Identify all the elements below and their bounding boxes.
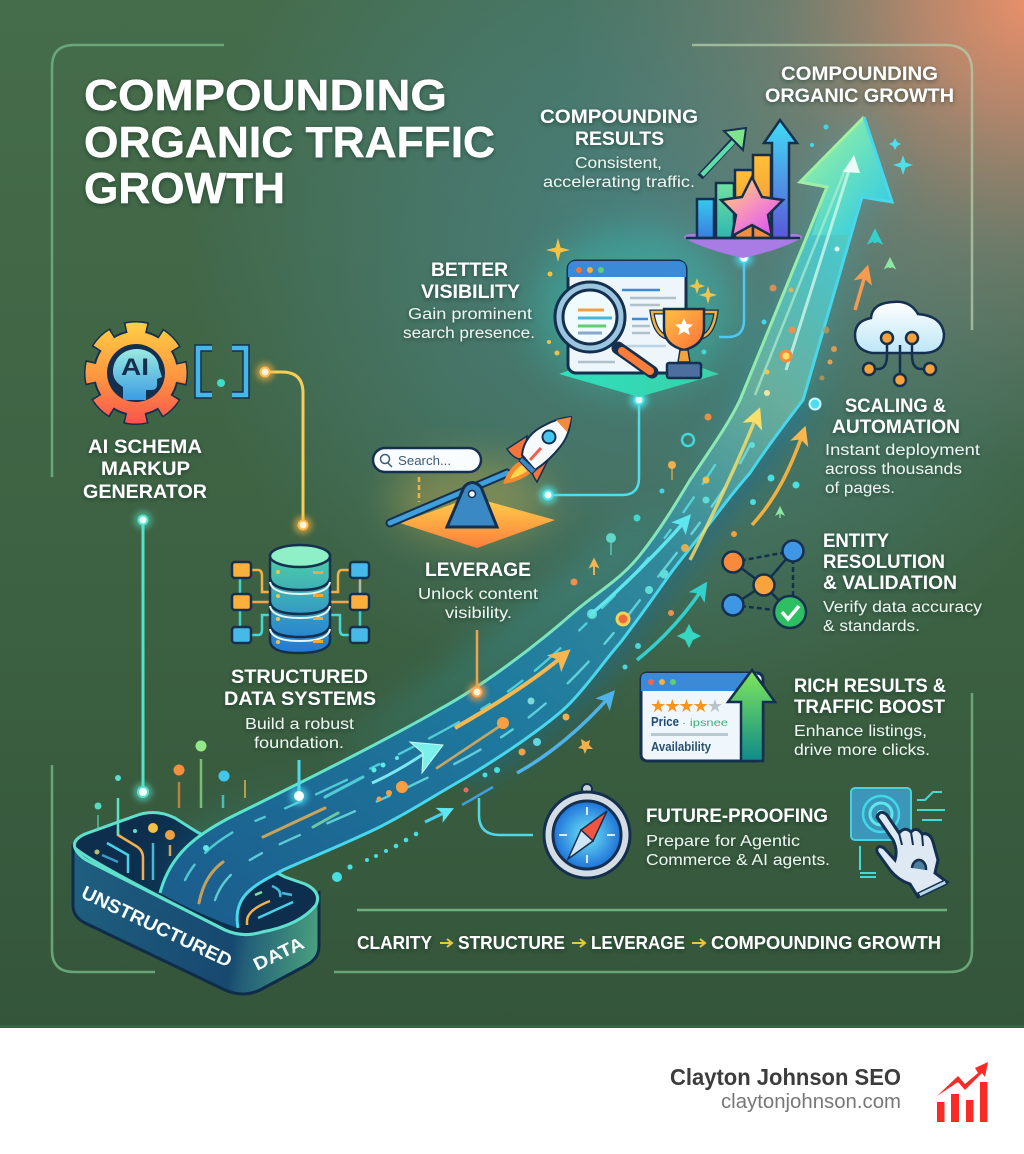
heading: Compounding Organic Growth: COMPOUNDING bbox=[781, 64, 938, 85]
AI letters: AI bbox=[121, 354, 149, 381]
box front rim bbox=[75, 848, 316, 935]
heading: Structured Data Systems: Build a robust bbox=[245, 716, 355, 733]
heading: Rich Results: TRAFFIC BOOST bbox=[794, 697, 945, 718]
heading: Compounding Organic Growth bbox=[765, 64, 954, 107]
heading: Rich Results: RICH RESULTS & bbox=[794, 676, 946, 697]
particles above box bbox=[94, 740, 245, 830]
divider bbox=[357, 909, 947, 911]
brand name: Clayton Johnson SEO bbox=[670, 1064, 901, 1090]
heading: Entity Resolution: & standards. bbox=[823, 618, 920, 635]
ribbon dots bbox=[203, 246, 840, 851]
connector: brackets to database bbox=[256, 363, 312, 534]
stars: ★★★★★ bbox=[650, 696, 723, 716]
tagline: STRUCTURE bbox=[458, 933, 565, 953]
heading: Entity Resolution: Verify data accuracy bbox=[823, 599, 982, 616]
heading: AI Schema Markup Generator: MARKUP bbox=[101, 459, 190, 480]
connector: leverage to ribbon bbox=[468, 630, 486, 701]
box label: UNSTRUCTURED bbox=[78, 883, 235, 972]
icon: AI gear bbox=[92, 329, 180, 417]
heading: Better Visibility: VISIBILITY bbox=[421, 282, 520, 303]
heading: Entity Resolution: RESOLUTION bbox=[823, 552, 945, 573]
heading: Scaling & Automation: across thousands bbox=[825, 461, 962, 478]
heading: Leverage: visibility. bbox=[445, 605, 512, 622]
box contents bbox=[102, 798, 293, 925]
inner arrow light bbox=[786, 170, 849, 370]
icon: rich results card: · ipsnee bbox=[682, 717, 728, 729]
sparkles bbox=[546, 238, 717, 356]
icon: better visibility window with magnifier and trophy bbox=[535, 230, 735, 397]
icon: brackets bbox=[198, 348, 246, 395]
brand url: claytonjohnson.com bbox=[721, 1091, 901, 1113]
heading: Leverage: LEVERAGE bbox=[425, 560, 531, 581]
title bbox=[84, 71, 495, 213]
tagline: CLARITY bbox=[357, 933, 432, 953]
icon: unstructured data box: DATA bbox=[250, 933, 307, 975]
heading: Compounding Results bbox=[540, 107, 698, 191]
icon: lever with search and rocket bbox=[373, 417, 571, 548]
heading: Leverage bbox=[418, 560, 539, 622]
heading: Structured Data Systems bbox=[224, 667, 376, 752]
heading: Scaling & Automation: AUTOMATION bbox=[832, 417, 960, 438]
heading: Future-Proofing: Prepare for Agentic bbox=[646, 833, 800, 850]
heading: Structured Data Systems: foundation. bbox=[254, 735, 344, 752]
icon: database bbox=[232, 545, 369, 653]
tagline: COMPOUNDING GROWTH bbox=[711, 933, 941, 953]
heading: Better Visibility: Gain prominent bbox=[408, 306, 533, 323]
connector dot: scaling bbox=[810, 398, 820, 410]
heading: Scaling & Automation: of pages. bbox=[825, 480, 895, 497]
rocket bbox=[503, 417, 571, 484]
heading: AI Schema Markup Generator: GENERATOR bbox=[83, 482, 207, 503]
dotted trail and particles bbox=[332, 124, 913, 882]
arrow head highlight bbox=[800, 117, 892, 235]
heading: AI Schema Markup Generator: AI SCHEMA bbox=[88, 437, 202, 458]
heading: Entity Resolution bbox=[823, 531, 982, 635]
heading: Future-Proofing bbox=[646, 806, 830, 869]
search bar bbox=[373, 448, 481, 472]
heading: Scaling & Automation: Instant deployment bbox=[825, 442, 981, 459]
search bar: Search... bbox=[398, 453, 451, 468]
heading: Compounding Results: RESULTS bbox=[575, 129, 664, 150]
heading: Structured Data Systems: STRUCTURED bbox=[231, 667, 368, 688]
trophy bbox=[652, 309, 716, 378]
arrows beside ribbon bbox=[425, 235, 890, 822]
heading: Better Visibility: BETTER bbox=[431, 260, 508, 281]
lane dashes bbox=[185, 445, 750, 903]
frame outline bbox=[52, 45, 972, 972]
connector: generator to box bbox=[134, 511, 152, 801]
title: COMPOUNDING bbox=[84, 71, 447, 120]
heading: Compounding Results: Consistent, bbox=[575, 155, 662, 172]
connector: lever to better visibility bbox=[539, 391, 648, 504]
connector: trophy to chart bbox=[719, 249, 753, 337]
price: Price bbox=[651, 715, 679, 729]
tagline: LEVERAGE bbox=[591, 933, 685, 953]
title: GROWTH bbox=[84, 164, 285, 213]
heading: Entity Resolution: & VALIDATION bbox=[823, 573, 957, 594]
title: ORGANIC TRAFFIC bbox=[84, 118, 495, 167]
heading: Rich Results: drive more clicks. bbox=[794, 742, 930, 759]
heading: Future-Proofing: Commerce & AI agents. bbox=[646, 852, 830, 869]
heading: Rich Results: Enhance listings, bbox=[794, 723, 927, 740]
heading: Better Visibility bbox=[403, 260, 535, 342]
heading: Leverage: Unlock content bbox=[418, 586, 539, 603]
heading: Future-Proofing: FUTURE-PROOFING bbox=[646, 806, 828, 827]
icon: entity graph bbox=[722, 540, 806, 628]
connector: ribbon to compass bbox=[462, 787, 533, 835]
icon: compounding results chart bbox=[684, 120, 802, 258]
heading: Better Visibility: search presence. bbox=[403, 325, 535, 342]
heading: AI Schema Markup Generator bbox=[83, 437, 207, 503]
icon: red growth chart bbox=[937, 1062, 988, 1122]
icon: cloud automation bbox=[855, 302, 944, 386]
connector: structured data to ribbon bbox=[290, 760, 308, 805]
tagline bbox=[357, 933, 941, 953]
heading: Scaling & Automation: SCALING & bbox=[845, 396, 946, 417]
growth ribbon arrow bbox=[160, 117, 892, 928]
heading: Rich Results bbox=[794, 676, 946, 759]
icon: unstructured data box bbox=[73, 798, 319, 994]
heading: Scaling & Automation bbox=[825, 396, 981, 497]
icon: robot hand touchscreen bbox=[851, 788, 947, 897]
icon: compass bbox=[544, 784, 630, 878]
heading: Entity Resolution: ENTITY bbox=[823, 531, 889, 552]
icon: rich results card bbox=[641, 670, 775, 761]
heading: Structured Data Systems: DATA SYSTEMS bbox=[224, 689, 376, 710]
footer bbox=[0, 1025, 1024, 1154]
heading: Compounding Results: COMPOUNDING bbox=[540, 107, 698, 128]
heading: Compounding Organic Growth: ORGANIC GROWTH bbox=[765, 86, 954, 107]
heading: Compounding Results: accelerating traffic. bbox=[543, 174, 695, 191]
ribbon arrows bbox=[372, 415, 757, 783]
availability: Availability bbox=[651, 740, 711, 754]
